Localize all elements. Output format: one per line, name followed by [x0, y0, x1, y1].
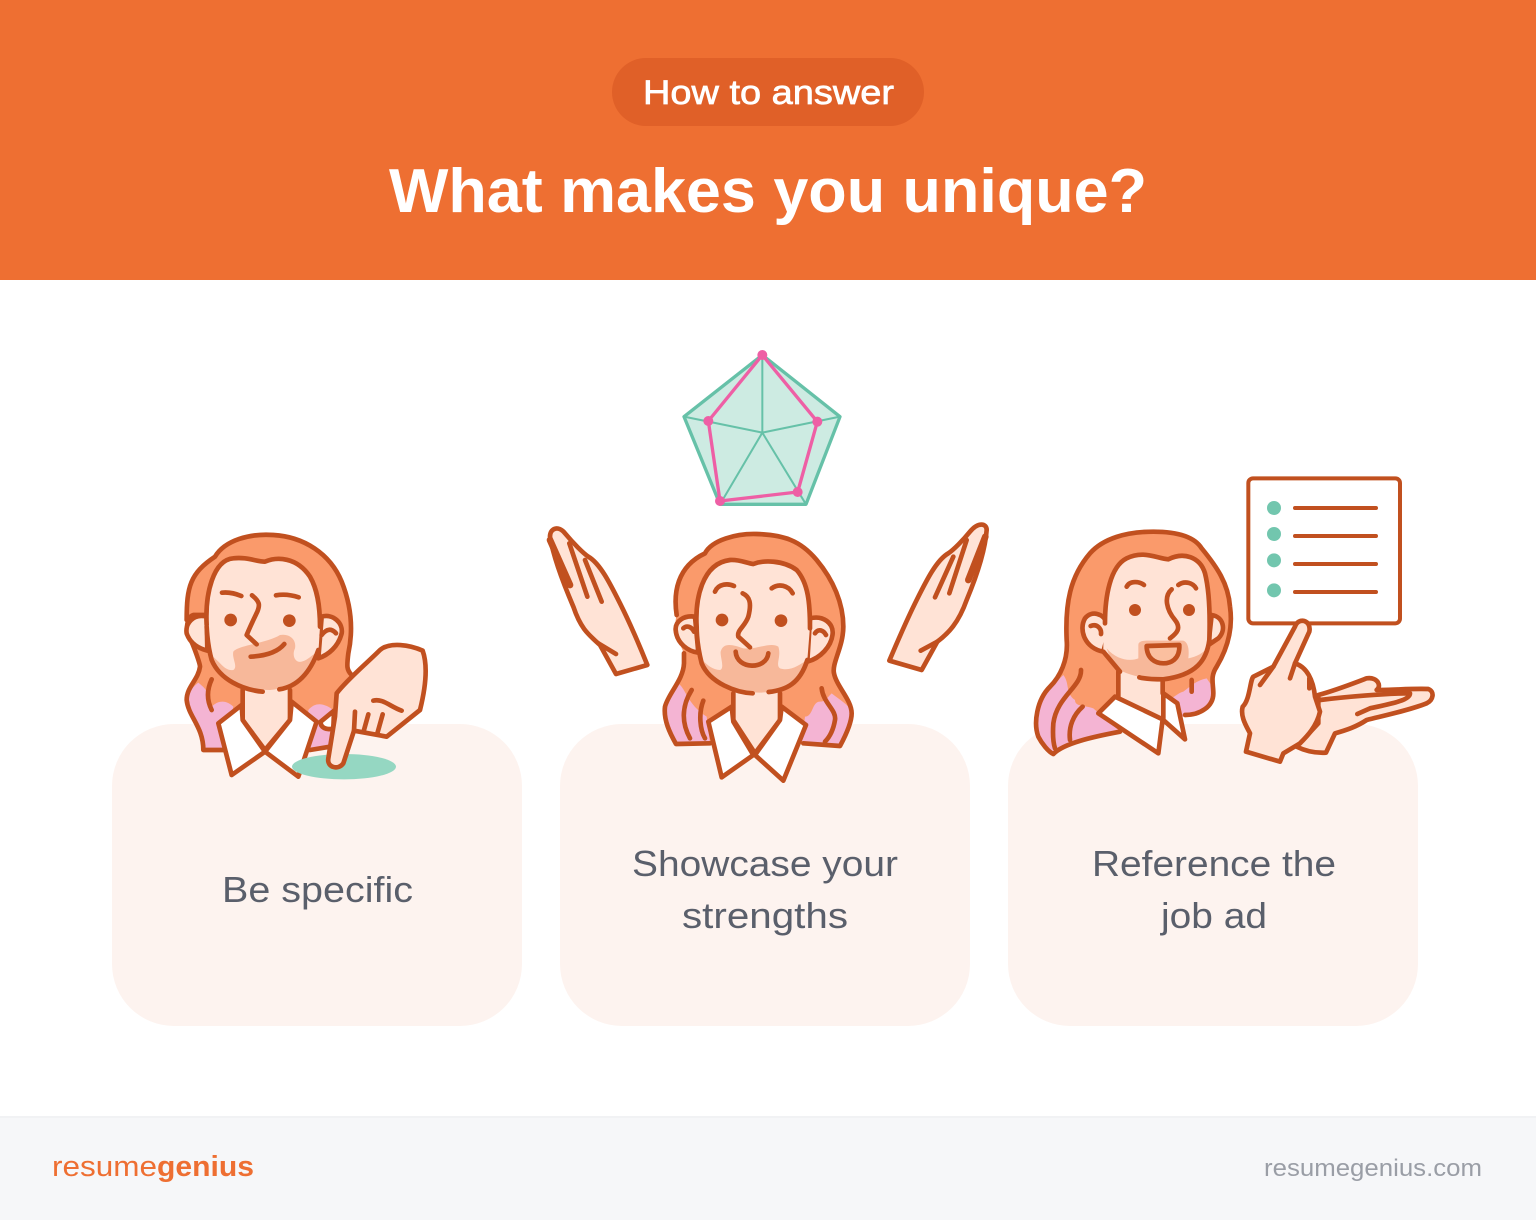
eyes — [1129, 604, 1195, 616]
collar — [218, 702, 317, 777]
panel: be specific — [112, 724, 522, 1026]
illustration: person referencing job ad — [1036, 478, 1433, 762]
illustration: person pointing down at spot — [186, 535, 426, 779]
radar chart icon — [684, 350, 840, 506]
hair outline — [665, 534, 852, 746]
beard — [703, 645, 807, 693]
brows, nose and ear detail — [1091, 582, 1196, 638]
eyes — [716, 614, 787, 627]
icon: teal spot — [292, 754, 396, 779]
ears — [1082, 614, 1223, 652]
left raised hand — [550, 529, 647, 674]
collar — [1098, 693, 1185, 753]
neck — [733, 692, 780, 753]
hair outline — [1036, 532, 1231, 754]
panel: be specific: Be specific — [222, 869, 413, 910]
neck — [243, 688, 290, 750]
neck — [1118, 670, 1163, 718]
hair — [187, 535, 352, 750]
collar — [708, 707, 806, 781]
pill badge: How to answer — [612, 58, 924, 126]
brows, nose and mouth — [222, 592, 336, 657]
pill badge: How to answer: How to answer — [643, 74, 894, 112]
back open hand — [1297, 678, 1433, 753]
title: What makes you unique? — [389, 157, 1147, 226]
thumb — [321, 711, 334, 729]
hair — [1036, 532, 1231, 754]
brows, nose and mouth — [683, 584, 826, 666]
face outline — [696, 560, 810, 693]
logo: resume genius — [52, 1151, 254, 1183]
front hand creases — [1260, 663, 1309, 688]
ears — [186, 616, 342, 658]
face — [1103, 555, 1210, 679]
face — [696, 560, 810, 693]
panel: showcase your strengths: strengths — [682, 895, 848, 936]
pink shirt — [665, 683, 852, 746]
header band — [0, 0, 1536, 280]
beard — [213, 635, 317, 690]
pointing hand — [328, 645, 426, 767]
panel: reference the job ad — [1008, 724, 1418, 1026]
pink shirt — [1036, 675, 1213, 754]
hair — [665, 534, 852, 746]
open mouth — [1147, 645, 1179, 663]
panel: showcase your strengths: Showcase your — [632, 843, 898, 884]
job ad card icon — [1248, 478, 1400, 623]
ears — [676, 616, 833, 662]
hair outline — [187, 535, 352, 750]
footer band — [0, 1116, 1536, 1220]
face outline — [1103, 555, 1210, 679]
website url: resumegenius.com — [1264, 1155, 1482, 1182]
panel: showcase your strengths — [560, 724, 970, 1026]
face outline — [206, 558, 320, 692]
back hand creases — [1320, 693, 1410, 714]
illustration: person showing strengths — [550, 350, 987, 781]
panel: reference the job ad: job ad — [1160, 895, 1267, 936]
right raised hand — [889, 525, 987, 670]
hand creases — [354, 700, 402, 733]
pink shirt — [187, 683, 333, 750]
panel: reference the job ad: Reference the — [1092, 843, 1336, 884]
front pointing hand — [1242, 621, 1320, 762]
beard — [1107, 641, 1208, 679]
face — [206, 558, 320, 690]
eyes — [224, 614, 296, 627]
